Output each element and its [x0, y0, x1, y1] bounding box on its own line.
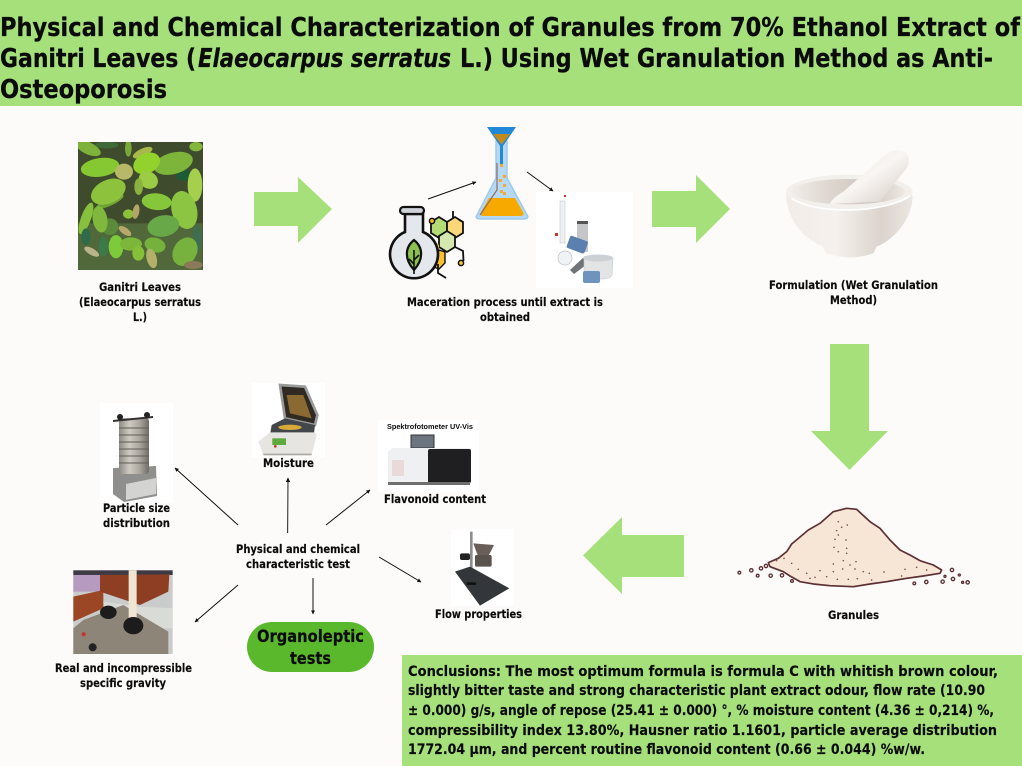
label: particle size distribution — [103, 501, 170, 530]
panel: conclusions — [402, 655, 1022, 766]
photo: mortar and pestle — [786, 150, 913, 257]
arrow: to flavonoid — [326, 490, 370, 525]
label: moisture: Moisture — [263, 456, 314, 470]
pill: organoleptic tests — [247, 622, 374, 672]
label: particle size distribution: distribution — [103, 516, 170, 530]
label: granules: Granules — [828, 608, 879, 622]
arrow: maceration to formulation — [652, 175, 730, 243]
illustration: granule pile — [738, 508, 969, 587]
arrow: to specific gravity — [195, 585, 238, 622]
arrow: to flow properties — [379, 557, 421, 582]
arrow: extract to flask — [428, 182, 476, 199]
label: formulation: Formulation (Wet Granulation — [769, 278, 938, 292]
label: physical and chemical characteristic test: Physical and chemical — [236, 542, 360, 556]
arrow: formulation to granules — [811, 344, 888, 470]
arrow: leaves to maceration — [254, 177, 332, 243]
label: ganitri leaves: (Elaeocarpus serratus — [79, 295, 201, 309]
pill: organoleptic tests: tests — [290, 649, 331, 669]
arrow: granules to tests — [583, 517, 684, 594]
label: flavonoid content: Flavonoid content — [384, 492, 486, 506]
photo: flow tester — [451, 529, 514, 606]
title banner: Osteoporosis — [0, 75, 167, 105]
title banner — [0, 0, 1022, 106]
label: physical and chemical characteristic test: characteristic test — [246, 557, 350, 571]
photo: moisture analyzer — [252, 383, 325, 457]
label: physical and chemical characteristic test — [236, 542, 360, 571]
label: particle size distribution: Particle size — [103, 501, 170, 515]
title banner: Elaeocarpus serratus — [198, 44, 451, 74]
panel: conclusions: Conclusions: The most optimum formula is formula C with whitish brown colour, — [408, 664, 998, 680]
photo: sieve shaker — [100, 403, 173, 503]
pill: organoleptic tests: Organoleptic — [257, 627, 364, 647]
photo: UV-Vis spectrophotometer — [378, 420, 479, 492]
panel: conclusions: 1772.04 µm, and percent routine flavonoid content (0.66 ± 0.044) %w/w. — [408, 742, 925, 758]
photo: tapped density tester — [73, 570, 173, 654]
label: maceration process — [407, 295, 603, 324]
label: ganitri leaves: Ganitri Leaves — [99, 280, 181, 294]
label: formulation: Method) — [830, 293, 877, 307]
label: ganitri leaves — [79, 280, 201, 324]
label: specific gravity — [55, 661, 192, 690]
label: maceration process: obtained — [480, 310, 530, 324]
label: flow properties: Flow properties — [435, 607, 522, 621]
photo: ganitri leaves — [74, 137, 203, 270]
icon: filtration flask — [476, 127, 528, 219]
title banner: Ganitri Leaves ( — [0, 44, 196, 74]
label: specific gravity: Real and incompressible — [55, 661, 192, 675]
label: ganitri leaves: L.) — [133, 310, 147, 324]
label: specific gravity: specific gravity — [80, 676, 166, 690]
arrow: flask to evaporator — [527, 172, 553, 191]
photo: UV-Vis spectrophotometer: Spektrofotometer UV-Vis — [387, 424, 473, 431]
label: maceration process: Maceration process until extract is — [407, 295, 603, 309]
arrow: to organoleptic — [312, 578, 314, 614]
label: formulation — [769, 278, 938, 307]
icon: leaf flask with molecule — [390, 207, 464, 278]
photo: rotary evaporator — [536, 192, 633, 288]
arrow: to moisture — [287, 478, 289, 533]
arrow: to particle size — [175, 468, 238, 525]
